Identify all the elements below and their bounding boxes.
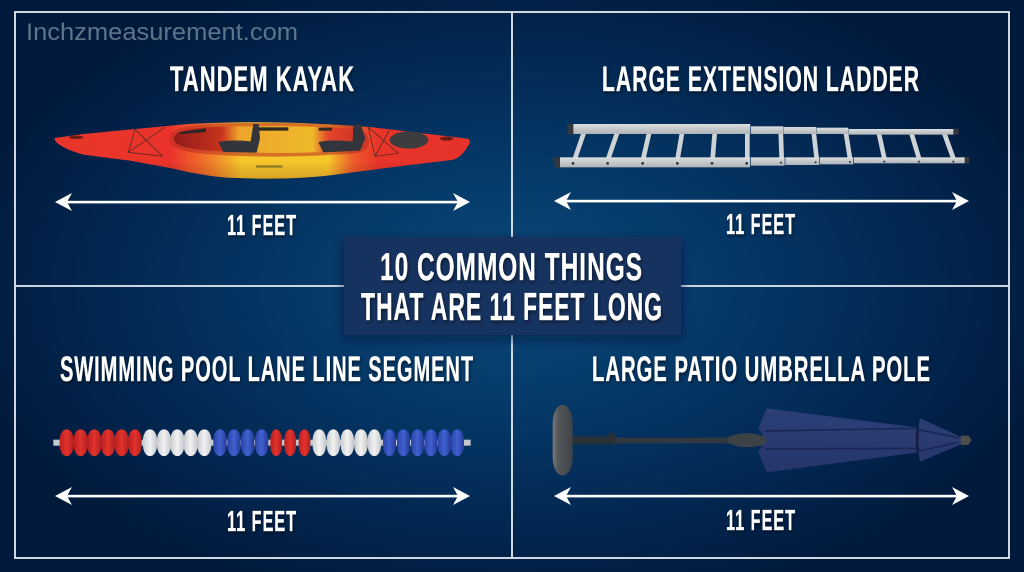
arrow: umbrella length (554, 487, 969, 505)
title (361, 246, 663, 329)
label: ladder length: 11 FEET (726, 209, 796, 241)
label: umbrella length: 11 FEET (726, 505, 796, 537)
heading: lane line: SWIMMING POOL LANE LINE SEGMENT (60, 350, 474, 389)
arrow: ladder length (554, 192, 969, 210)
icon: lane line (53, 429, 471, 456)
watermark: Inchzmeasurement.com (26, 19, 298, 46)
title: 10 COMMON THINGS (380, 246, 643, 289)
heading: tandem kayak: TANDEM KAYAK (170, 60, 355, 99)
panel: swimming pool lane line (53, 350, 474, 538)
umbrella base (553, 405, 573, 475)
icon: kayak (55, 122, 470, 179)
cockpit (169, 123, 369, 157)
icon: ladder (553, 124, 969, 168)
icon: patio umbrella (553, 405, 972, 475)
title: THAT ARE 11 FEET LONG (361, 286, 663, 329)
seats (218, 124, 260, 153)
arrow: kayak length (55, 193, 470, 211)
label: lane line length: 11 FEET (227, 506, 297, 538)
deck lines (128, 127, 398, 156)
arrow: lane line length (55, 487, 470, 505)
panel: large patio umbrella pole (553, 350, 972, 537)
label: kayak length: 11 FEET (227, 210, 297, 242)
title box (344, 237, 681, 335)
panel: large extension ladder (553, 60, 969, 241)
canopy (758, 408, 963, 472)
panel: tandem kayak (55, 60, 470, 242)
hatch (390, 131, 428, 149)
title background (344, 237, 681, 335)
